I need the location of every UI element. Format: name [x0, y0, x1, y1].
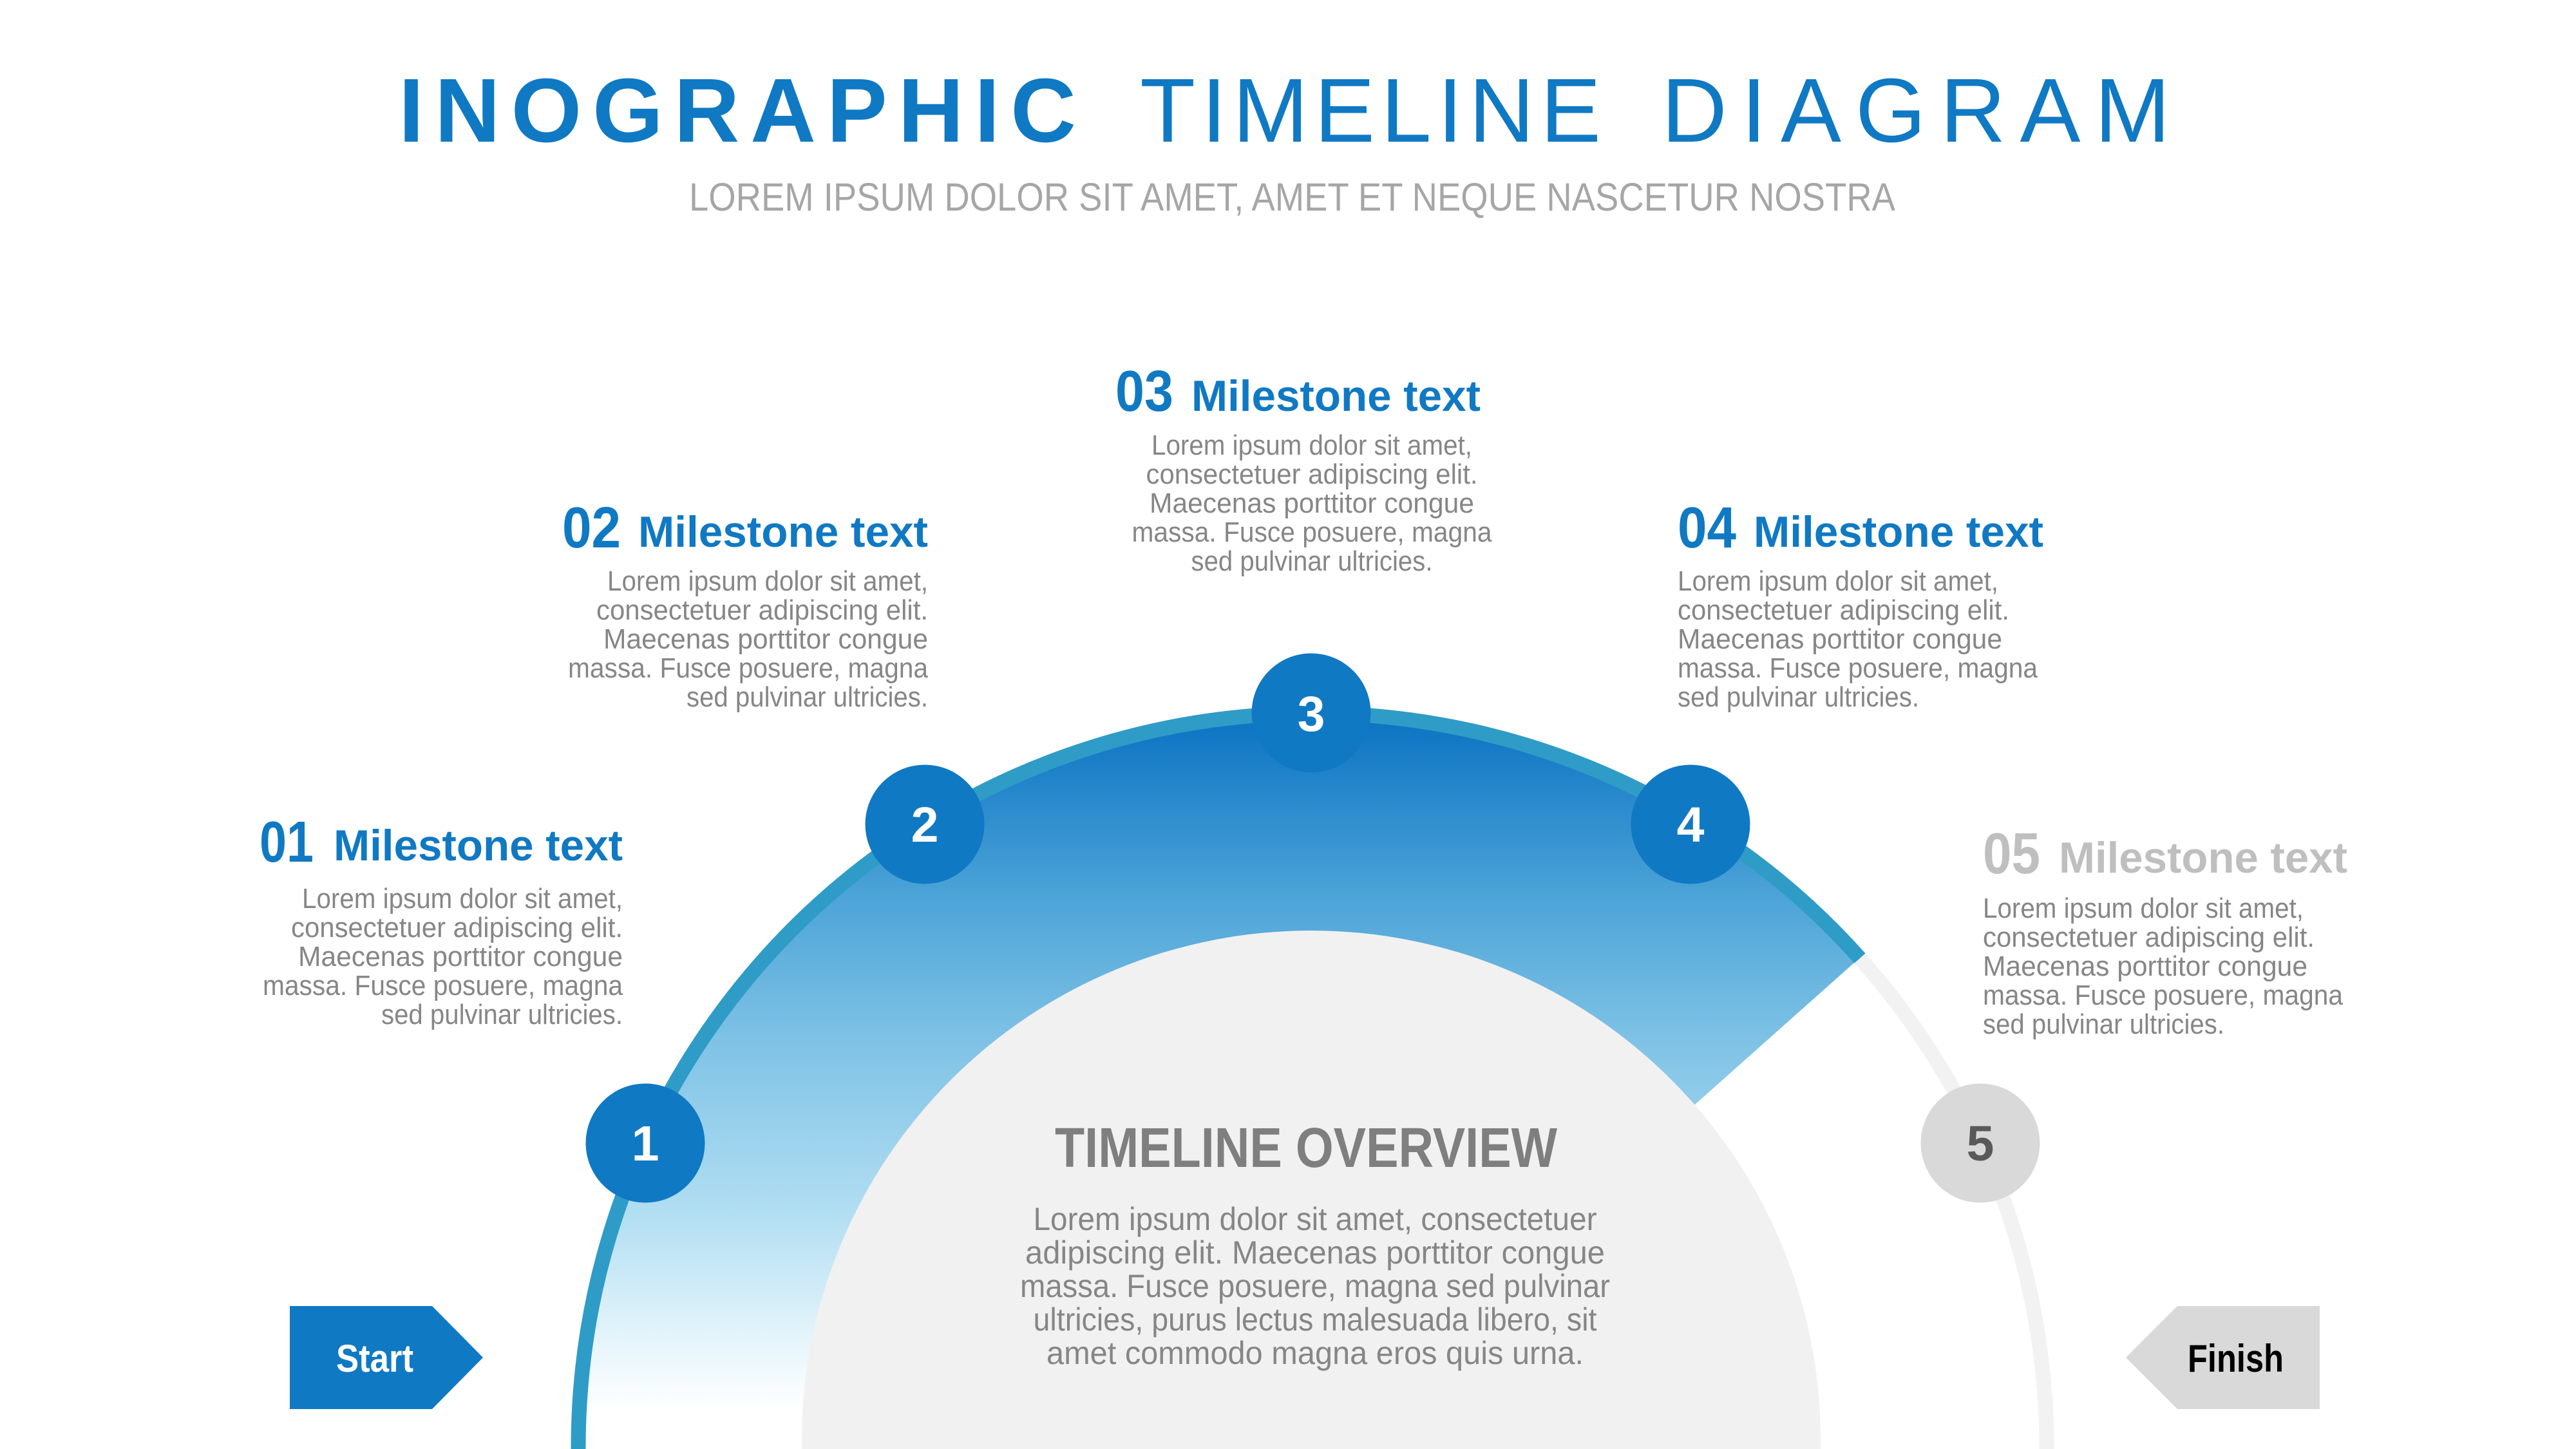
milestone 03 body	[1132, 430, 1492, 577]
title: DIAGRAM	[1662, 59, 2170, 161]
milestone 04 heading: 04	[1678, 496, 1736, 560]
milestone 04 body: sed pulvinar ultricies.	[1678, 681, 1919, 713]
milestone 02 heading: 02	[562, 496, 621, 560]
marker 5: 5	[1967, 1116, 1994, 1171]
milestone 03 heading: 03	[1115, 359, 1173, 424]
milestone 01 body: Lorem ipsum dolor sit amet,	[302, 883, 623, 914]
milestone 05 body: Maecenas porttitor congue	[1983, 951, 2307, 982]
milestone 02 heading	[562, 496, 928, 560]
milestone 02 body	[568, 565, 928, 713]
milestone 02 body: sed pulvinar ultricies.	[687, 681, 928, 713]
teal progress arc	[578, 714, 1860, 1449]
milestone 03 body: Maecenas porttitor congue	[1150, 488, 1474, 519]
marker 2: 2	[911, 797, 938, 853]
marker 1	[586, 1083, 705, 1203]
overview body: ultricies, purus lectus malesuada libero, sit	[1033, 1302, 1597, 1338]
milestone 02 body: Maecenas porttitor congue	[603, 623, 928, 655]
milestone 05 body: massa. Fusce posuere, magna	[1983, 980, 2343, 1011]
marker 5	[1920, 1083, 2040, 1203]
milestone 01 heading	[260, 810, 623, 875]
start arrow	[290, 1306, 483, 1409]
finish arrow: Finish	[2188, 1337, 2284, 1380]
milestone 05 body: sed pulvinar ultricies.	[1983, 1009, 2224, 1040]
overview heading: TIMELINE OVERVIEW	[1055, 1117, 1558, 1179]
milestone 04 body: Lorem ipsum dolor sit amet,	[1678, 565, 1998, 597]
marker 1: 1	[632, 1116, 659, 1171]
milestone 04 body: Maecenas porttitor congue	[1678, 623, 2002, 655]
gradient progress wedge	[571, 706, 1865, 1449]
milestone 02 body: Lorem ipsum dolor sit amet,	[607, 565, 928, 597]
milestone 03 body: consectetuer adipiscing elit.	[1146, 459, 1477, 490]
title	[399, 59, 2170, 161]
milestone 01 body: Maecenas porttitor congue	[298, 941, 623, 972]
milestone 01 body	[263, 883, 623, 1030]
milestone 03 heading	[1115, 359, 1481, 424]
milestone 03 body: massa. Fusce posuere, magna	[1132, 516, 1492, 548]
milestone 04 body: consectetuer adipiscing elit.	[1678, 594, 2009, 626]
milestone 05 heading: 05	[1983, 822, 2040, 886]
inner grey semicircle	[802, 931, 1821, 1449]
marker 3	[1252, 653, 1370, 773]
milestone 02 body: consectetuer adipiscing elit.	[596, 594, 928, 626]
milestone 03 text	[1115, 359, 1492, 577]
overview body: amet commodo magna eros quis urna.	[1046, 1335, 1584, 1371]
overview body: Lorem ipsum dolor sit amet, consectetuer	[1033, 1201, 1597, 1237]
milestone 03 body: Lorem ipsum dolor sit amet,	[1151, 430, 1472, 461]
milestone 02 text	[562, 496, 928, 713]
remaining grey arc	[1860, 958, 2047, 1449]
milestone 01 heading: Milestone text	[334, 821, 623, 870]
milestone 01 body: sed pulvinar ultricies.	[381, 999, 623, 1030]
milestone 03 heading: Milestone text	[1191, 372, 1481, 421]
start arrow: Start	[336, 1337, 413, 1380]
finish arrow	[2126, 1306, 2320, 1409]
milestone 04 body: massa. Fusce posuere, magna	[1678, 652, 2038, 684]
milestone 05 text	[1983, 822, 2347, 1040]
milestone 05 heading	[1983, 822, 2347, 886]
milestone 03 body: sed pulvinar ultricies.	[1191, 545, 1432, 577]
marker 2	[866, 765, 984, 884]
overview body	[1020, 1201, 1610, 1371]
marker 4: 4	[1677, 797, 1705, 853]
milestone 01 body: consectetuer adipiscing elit.	[291, 912, 623, 943]
overview body: massa. Fusce posuere, magna sed pulvinar	[1020, 1268, 1610, 1304]
milestone 04 heading: Milestone text	[1754, 507, 2043, 556]
milestone 04 heading	[1678, 496, 2043, 560]
milestone 04 text	[1678, 496, 2043, 713]
milestone 05 body: Lorem ipsum dolor sit amet,	[1983, 893, 2304, 924]
milestone 04 body	[1678, 565, 2038, 713]
marker 3: 3	[1298, 687, 1325, 742]
milestone 05 body	[1983, 893, 2343, 1040]
marker 4	[1631, 765, 1750, 884]
title: INOGRAPHIC	[399, 59, 1076, 161]
overview body: adipiscing elit. Maecenas porttitor congue	[1025, 1235, 1605, 1271]
milestone 01 text	[260, 810, 623, 1030]
milestone 02 heading: Milestone text	[638, 507, 928, 556]
milestone 02 body: massa. Fusce posuere, magna	[568, 652, 928, 684]
milestone 01 body: massa. Fusce posuere, magna	[263, 970, 623, 1001]
milestone 01 heading: 01	[260, 810, 314, 875]
title: TIMELINE	[1140, 59, 1601, 161]
milestone 05 body: consectetuer adipiscing elit.	[1983, 922, 2315, 953]
subtitle: LOREM IPSUM DOLOR SIT AMET, AMET ET NEQUE NASCETUR NOSTRA	[689, 175, 1895, 219]
milestone 05 heading: Milestone text	[2059, 833, 2347, 882]
